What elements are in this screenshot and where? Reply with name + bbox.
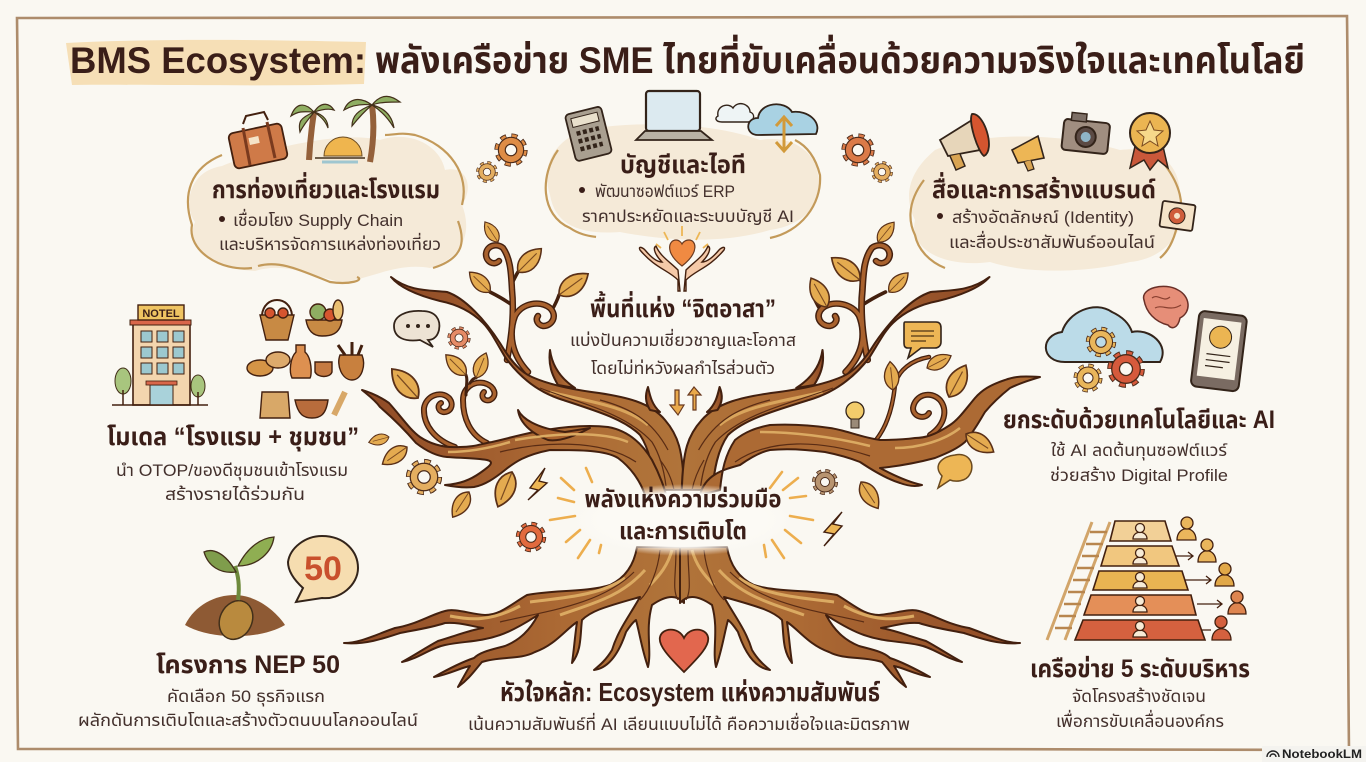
text: tourism details: และบริหารจัดการแหล่งท่องเที่ยว [219, 232, 441, 254]
text: accounting details: ราคาประหยัดและระบบบัญชี AI [582, 207, 794, 226]
panel: volunteer space [570, 226, 796, 415]
icon: suitcase [228, 112, 288, 169]
text: NEP details: คัดเลือก 50 ธุรกิจแรก [167, 687, 325, 707]
text: network details: เพื่อการขับเคลื่อนองค์กร [1056, 709, 1224, 731]
panel: five-level network [1030, 517, 1250, 731]
heading: technology and AI: ยกระดับด้วยเทคโนโลยีและ AI [1003, 406, 1275, 434]
text: accounting details: พัฒนาซอฟต์แวร์ ERP [595, 182, 735, 201]
small tree icons [394, 137, 972, 549]
heading: collaboration and growth: พลังแห่งความร่วมมือ [584, 485, 782, 513]
icon: people in pyramid [1133, 524, 1147, 637]
icon: speech bubble dots [394, 311, 439, 347]
sun rays [550, 468, 813, 558]
text: NEP details: ผลักดันการเติบโตและสร้างตัวตนบนโลกออนไลน์ [78, 710, 418, 730]
text: media details: สร้างอัตลักษณ์ (Identity) [952, 207, 1134, 227]
central glow [571, 484, 795, 556]
icon: managers with arrows [1176, 517, 1246, 640]
icon: target photo [1159, 201, 1196, 231]
panel: core heart [468, 630, 910, 734]
heading: collaboration and growth: และการเติบโต [619, 518, 747, 545]
heading: tourism and hotels: การท่องเที่ยวและโรงแรม [212, 172, 440, 204]
heading: five-level network: เครือข่าย 5 ระดับบริหาร [1030, 655, 1250, 683]
text: media details: และสื่อประชาสัมพันธ์ออนไลน์ [949, 230, 1155, 252]
icon: laptop [636, 91, 712, 140]
title: พลังเครือข่าย SME ไทยที่ขับเคลื่อนด้วยความจริงใจและเทคโนโลยี [375, 34, 1305, 81]
illustrated tree [344, 218, 1040, 687]
text: tourism details: เชื่อมโยง Supply Chain [233, 208, 403, 230]
heading: NEP 50: โครงการ NEP 50 [156, 651, 340, 679]
text: volunteer details [570, 328, 796, 378]
text: NEP details [78, 687, 418, 730]
icon: number 50 bubble: 50 [304, 550, 342, 588]
icon: brain [1144, 286, 1188, 328]
text: technology details: ช่วยสร้าง Digital Profile [1050, 465, 1228, 485]
icon: calculator [565, 106, 612, 162]
text: media details [937, 207, 1155, 252]
icon: cloud with gears [1046, 307, 1163, 389]
icon: local products [247, 300, 364, 418]
NotebookLM watermark [1262, 746, 1366, 762]
text: core details: เน้นความสัมพันธ์ที่ AI เลียนแบบไม่ได้ คือความเชื่อใจและมิตรภาพ [468, 712, 910, 734]
text: hotel details: นำ OTOP/ของดีชุมชนเข้าโรงแรม [116, 460, 348, 481]
icon: lightning bolts [528, 468, 842, 546]
heading: accounting and IT: บัญชีและไอที [620, 151, 746, 179]
text: network details [1056, 686, 1224, 731]
text: technology details [1050, 440, 1228, 485]
icon: megaphone [940, 114, 989, 170]
icon: clouds with sync arrows [716, 104, 817, 151]
text: tourism details [219, 208, 441, 254]
icon: yellow bubble [938, 455, 972, 488]
panel: NEP 50 [78, 536, 418, 730]
icon: pyramid levels [1075, 521, 1205, 640]
heading: media and branding: สื่อและการสร้างแบรนด์ [932, 172, 1156, 204]
text: network details: จัดโครงสร้างชัดเจน [1072, 686, 1206, 706]
text: technology details: ใช้ AI ลดต้นทุนซอฟต์แวร์ [1051, 440, 1228, 461]
title [66, 34, 1305, 85]
icon: hands holding heart [639, 226, 725, 291]
panel: upgrade with technology and AI [1003, 286, 1275, 485]
icon: ladder [1047, 522, 1110, 640]
icon: small megaphone [1012, 136, 1044, 171]
heading: collaboration and growth [584, 485, 782, 545]
text: volunteer details: โดยไม่ท่หวังผลกำไรส่วนตัว [591, 359, 775, 378]
text: accounting details [579, 182, 794, 226]
heading: core relationships: หัวใจหลัก: Ecosystem แห่งความสัมพันธ์ [500, 677, 880, 707]
icon: hotel [112, 305, 208, 405]
icon: light bulb [846, 402, 864, 428]
panel: hotel plus community model [107, 300, 364, 504]
text: hotel details [116, 460, 348, 504]
panel: accounting and IT [546, 91, 820, 240]
title: BMS Ecosystem: [70, 40, 366, 81]
icon: phone [1190, 310, 1247, 392]
NotebookLM watermark: NotebookLM [1282, 747, 1362, 761]
panel: tourism and hotels [188, 96, 468, 283]
icon: camera [1061, 112, 1111, 154]
icon: note bubble [904, 322, 941, 358]
text: hotel details: สร้างรายได้ร่วมกัน [165, 484, 305, 504]
icon: award badge [1130, 113, 1170, 170]
heading: volunteer space: พื้นที่แห่ง “จิตอาสา” [590, 291, 776, 323]
icon: sprouting seed [185, 537, 285, 645]
icon: up and down arrows [670, 387, 701, 415]
icon: palm trees and sunset [291, 96, 400, 162]
heading: hotel plus community: โมเดล “โรงแรม + ชุมชน” [107, 423, 359, 452]
icon: hotel: NOTEL [142, 308, 180, 320]
icon: heart [660, 630, 708, 672]
panel: media and branding [909, 112, 1196, 271]
icon: number 50 bubble [288, 536, 358, 602]
text: volunteer details: แบ่งปันความเชี่ยวชาญและโอกาส [570, 328, 796, 350]
